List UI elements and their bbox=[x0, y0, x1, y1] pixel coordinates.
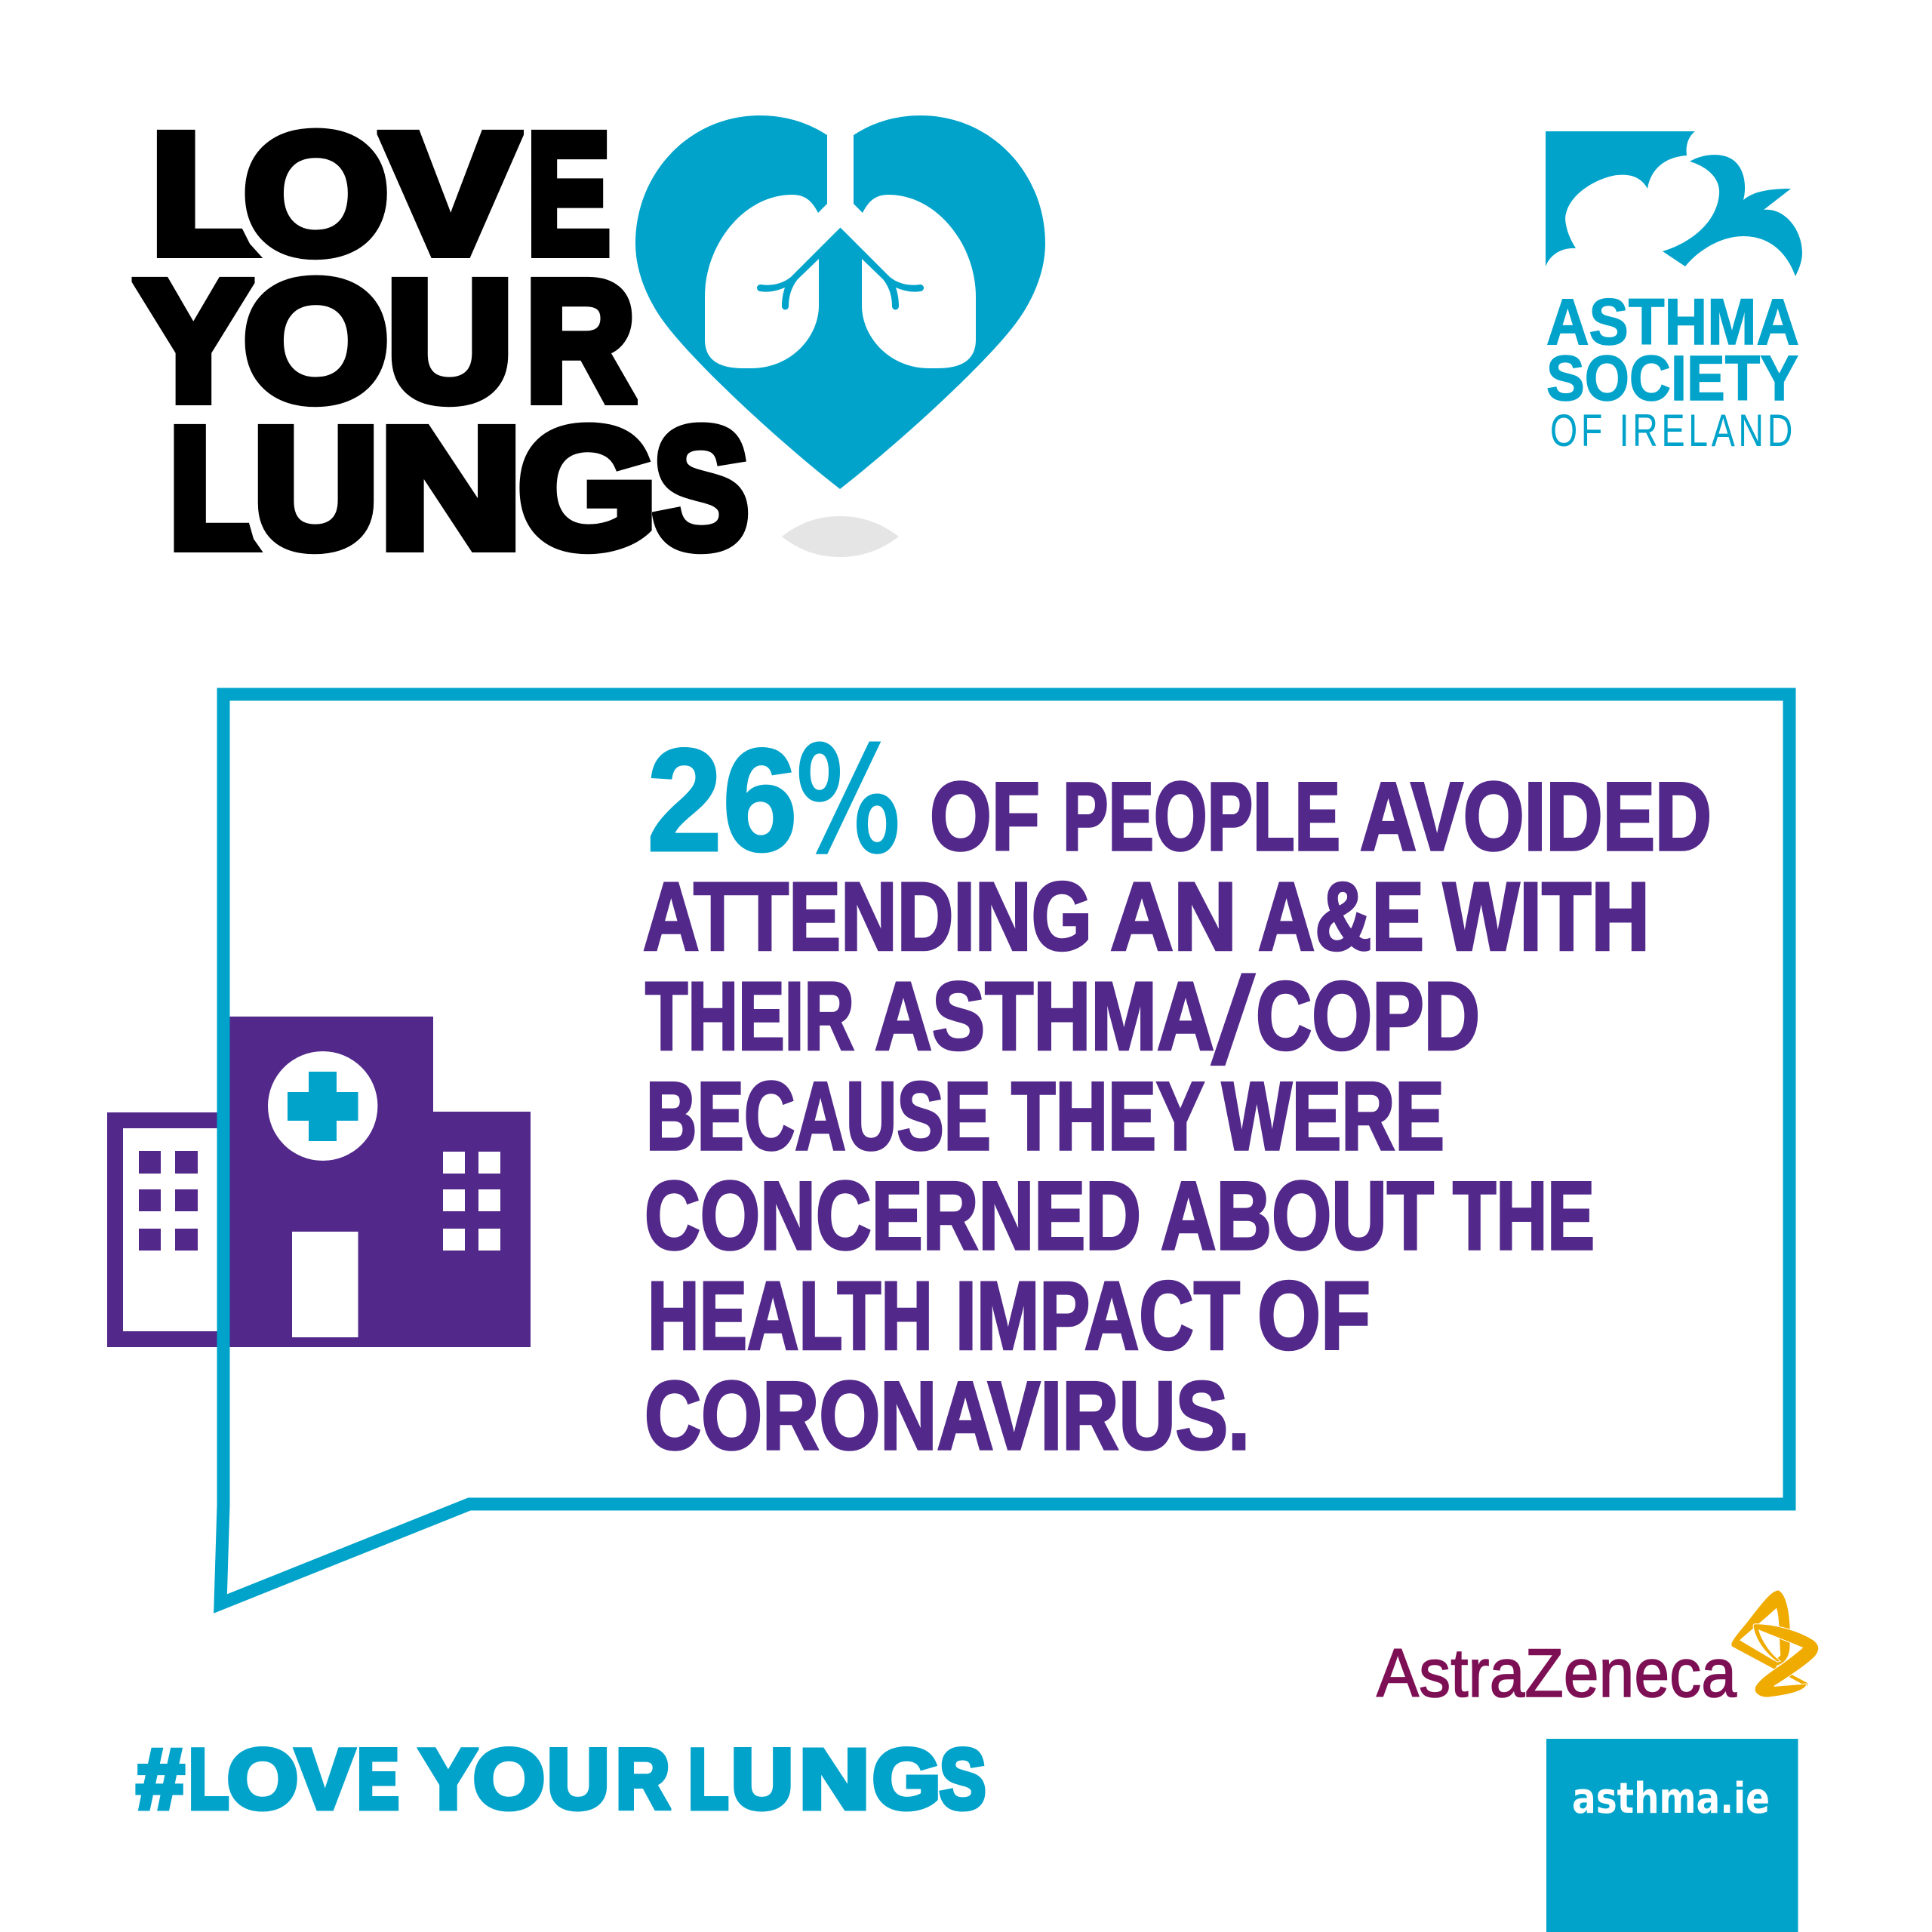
title line: YOUR bbox=[131, 246, 638, 437]
title line: YOUR: U bbox=[386, 246, 513, 437]
logo text bbox=[1546, 286, 1799, 456]
title line: LUNGS: N bbox=[379, 393, 523, 584]
title line: LUNGS bbox=[168, 393, 749, 584]
statistic: 26%: 26 bbox=[647, 718, 798, 882]
main statement text bbox=[643, 717, 1712, 1470]
hashtag: #LOVE YOUR LUNGS: V bbox=[296, 1732, 355, 1826]
icon: Asthma Society cloud and bird mark bbox=[1546, 131, 1802, 276]
hashtag: #LOVE YOUR LUNGS: # bbox=[137, 1732, 184, 1826]
line 3: COPD bbox=[1256, 963, 1480, 1071]
title line: YOUR: R bbox=[525, 246, 636, 437]
line 3: ASTHMA bbox=[875, 963, 1214, 1071]
hashtag: #LOVE YOUR LUNGS: G bbox=[872, 1732, 940, 1826]
title line: LUNGS: G bbox=[518, 393, 657, 584]
logo text: OF IRELAND bbox=[1550, 405, 1796, 456]
title line: LOVE: V bbox=[383, 99, 518, 290]
logo text: SOCIETY bbox=[1546, 343, 1798, 414]
icon: hospital building bbox=[107, 1017, 531, 1347]
line 2: A&E bbox=[1258, 863, 1424, 971]
title line: LUNGS: L bbox=[168, 393, 263, 584]
line 1 bbox=[930, 763, 1712, 871]
line 1: OF bbox=[930, 763, 1040, 871]
line 7: CORONAVIRUS. bbox=[645, 1362, 1250, 1470]
statistic: 26% bbox=[647, 717, 903, 885]
hashtag: #LOVE YOUR LUNGS: U bbox=[731, 1732, 793, 1826]
line 5: CONCERNED bbox=[645, 1162, 1141, 1270]
line 2: WITH bbox=[1443, 863, 1650, 971]
hashtag: #LOVE YOUR LUNGS: E bbox=[356, 1732, 398, 1826]
hashtag: #LOVE YOUR LUNGS: Y bbox=[420, 1732, 477, 1826]
line 1: PEOPLE bbox=[1063, 763, 1340, 871]
line 5: THE bbox=[1453, 1162, 1595, 1270]
line 5 bbox=[645, 1162, 1595, 1270]
title line: LOVE bbox=[150, 99, 611, 290]
hashtag: #LOVE YOUR LUNGS: S bbox=[940, 1732, 986, 1826]
line 4: WERE bbox=[1222, 1063, 1444, 1171]
title line: YOUR: O bbox=[243, 246, 389, 437]
line 6: IMPACT bbox=[955, 1262, 1240, 1371]
logo: Asthma Society of Ireland bbox=[1546, 131, 1802, 456]
title line: LOVE: E bbox=[527, 99, 611, 290]
icon: grey shadow under heart bbox=[782, 516, 899, 557]
hashtag: #LOVE YOUR LUNGS: O bbox=[226, 1732, 298, 1826]
title: LOVE YOUR LUNGS bbox=[131, 99, 749, 584]
icon: AstraZeneca gold symbol bbox=[1731, 1590, 1819, 1697]
line 4: BECAUSE bbox=[646, 1063, 991, 1171]
hashtag: #LOVE YOUR LUNGS: L bbox=[688, 1732, 729, 1826]
website box: asthma.ie bbox=[1546, 1739, 1798, 1932]
title line: LUNGS: S bbox=[653, 393, 749, 584]
hashtag: #LOVE YOUR LUNGS: N bbox=[799, 1732, 869, 1826]
line 5: ABOUT bbox=[1161, 1162, 1434, 1270]
hashtag: #LOVE YOUR LUNGS: O bbox=[472, 1732, 544, 1826]
line 1: AVOIDED bbox=[1360, 763, 1712, 871]
line 4: THEY bbox=[1011, 1063, 1204, 1171]
logo text: ASTHMA bbox=[1546, 286, 1799, 358]
hashtag: #LOVE YOUR LUNGS: U bbox=[547, 1732, 609, 1826]
line 6: HEALTH bbox=[648, 1262, 933, 1371]
logo: AstraZeneca bbox=[1377, 1590, 1819, 1712]
line 2 bbox=[643, 863, 1650, 971]
statistic: 26%: % bbox=[794, 717, 903, 885]
title line: LOVE: L bbox=[150, 99, 263, 290]
line 3: / bbox=[1212, 952, 1255, 1090]
icon: heart with lungs bbox=[635, 115, 1045, 489]
title line: LUNGS: U bbox=[253, 393, 379, 584]
line 3: THEIR bbox=[645, 963, 854, 1071]
line 6: OF bbox=[1257, 1262, 1371, 1371]
hashtag: #LOVE YOUR LUNGS: R bbox=[616, 1732, 669, 1826]
line 3 bbox=[645, 952, 1480, 1090]
website box: asthma.ie: asthma.ie bbox=[1572, 1774, 1770, 1823]
hashtag: #LOVE YOUR LUNGS: L bbox=[189, 1732, 229, 1826]
title line: LOVE: O bbox=[243, 99, 389, 290]
title line: YOUR: Y bbox=[135, 246, 251, 437]
line 2: ATTENDING bbox=[643, 863, 1092, 971]
hashtag: #LOVE YOUR LUNGS bbox=[135, 1732, 986, 1826]
line 6 bbox=[648, 1262, 1371, 1371]
line 2: AN bbox=[1110, 863, 1237, 971]
speech bubble outline bbox=[220, 694, 1789, 1604]
AstraZeneca wordmark: AstraZeneca bbox=[1377, 1635, 1737, 1712]
line 4 bbox=[646, 1063, 1444, 1171]
